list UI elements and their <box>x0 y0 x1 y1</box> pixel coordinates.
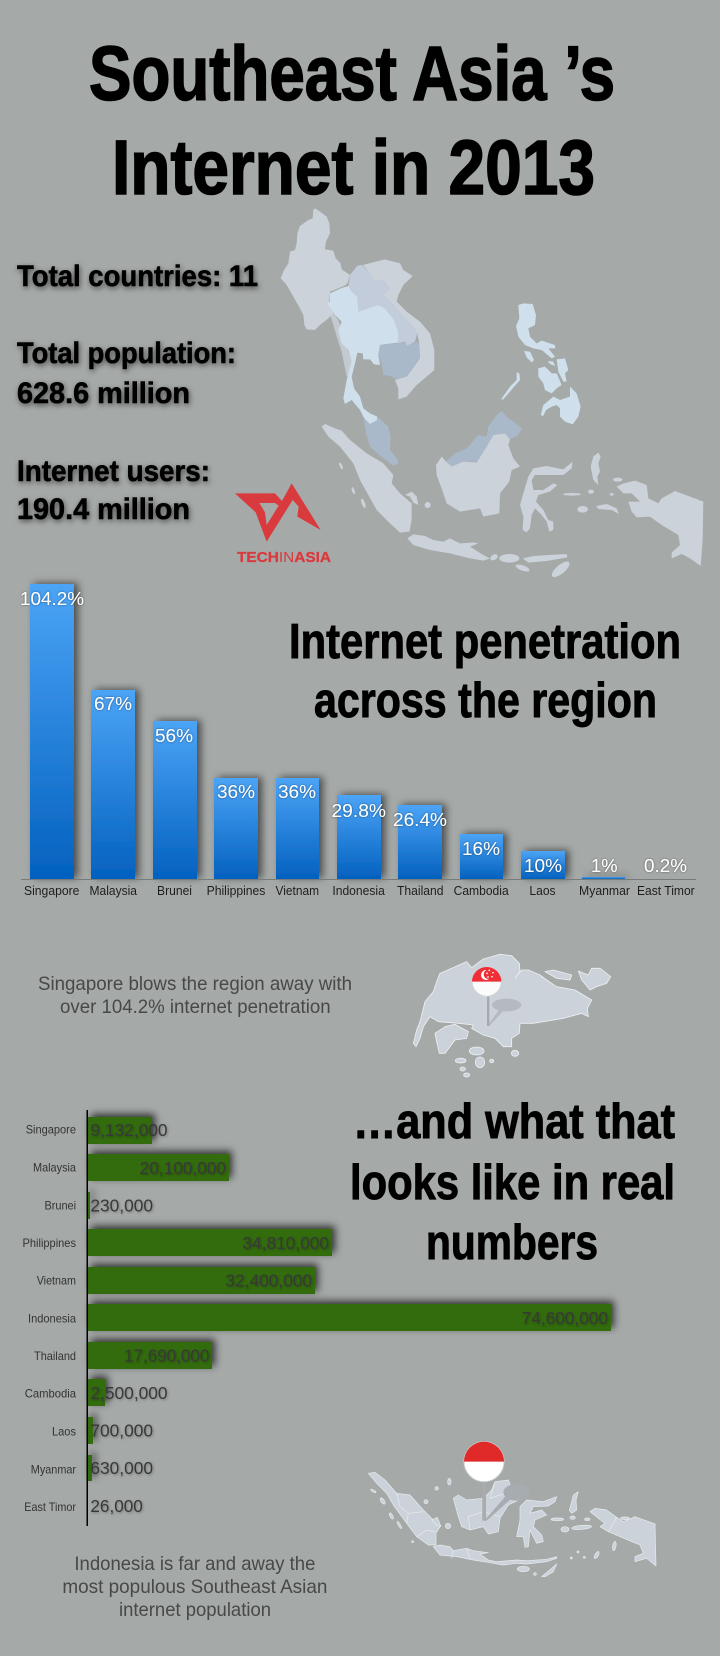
province lines <box>397 1482 617 1558</box>
percentage labels: 104.2% <box>20 588 84 609</box>
value labels: 34,810,000 <box>242 1233 329 1253</box>
caption: Indonesia: internet population <box>119 1599 271 1621</box>
value labels: 74,600,000 <box>522 1308 608 1328</box>
value labels: 20,100,000 <box>140 1158 226 1178</box>
value labels: 230,000 <box>90 1196 153 1216</box>
percentage labels <box>20 588 687 876</box>
bars <box>30 584 625 879</box>
percentage labels: 26.4% <box>393 809 447 830</box>
heading: real numbers: numbers <box>426 1216 598 1270</box>
caption: Singapore <box>38 973 352 1018</box>
logo: Tech in Asia: TECHINASIA <box>237 549 331 566</box>
country labels: Malaysia <box>90 884 137 898</box>
bar chart: internet users <box>22 1110 611 1526</box>
caption: Indonesia: most populous Southeast Asian <box>62 1576 327 1598</box>
caption: Singapore: Singapore blows the region away with <box>38 973 352 995</box>
country labels: Singapore <box>26 1122 76 1136</box>
caption: Singapore: over 104.2% internet penetration <box>60 996 331 1018</box>
country labels: Myanmar <box>579 884 630 898</box>
country labels <box>24 884 695 898</box>
caption: Indonesia <box>62 1553 327 1621</box>
country labels: Thailand <box>34 1349 76 1363</box>
country labels: Vietnam <box>276 884 319 898</box>
logo: Tech in Asia <box>235 483 331 566</box>
value labels: 26,000 <box>90 1496 143 1516</box>
green bars <box>88 1117 611 1481</box>
percentage labels: 36% <box>278 781 316 802</box>
country labels: Philippines <box>207 884 265 898</box>
country labels: Thailand <box>397 884 444 898</box>
country labels: Laos <box>529 884 556 898</box>
country labels: Laos <box>52 1424 76 1438</box>
country labels: Brunei <box>157 884 192 898</box>
percentage labels: 36% <box>217 781 255 802</box>
title: Internet in 2013 <box>112 125 595 211</box>
value labels <box>90 1120 608 1516</box>
country labels: Cambodia <box>25 1386 76 1400</box>
value labels: 9,132,000 <box>90 1120 168 1140</box>
value labels: 700,000 <box>90 1421 153 1441</box>
value labels: 2,500,000 <box>90 1383 168 1403</box>
percentage labels: 16% <box>462 838 500 859</box>
title <box>89 31 615 211</box>
heading: internet penetration <box>289 615 681 728</box>
country labels <box>22 1122 76 1514</box>
percentage labels: 56% <box>155 725 193 746</box>
country labels: East Timor <box>637 884 695 898</box>
country labels: East Timor <box>24 1500 76 1514</box>
pin: Singapore flag <box>472 967 501 1026</box>
key statistics: Total countries: 11 <box>17 260 258 293</box>
bar chart: internet penetration <box>20 584 696 898</box>
value labels: 32,400,000 <box>225 1271 312 1291</box>
country labels: Vietnam <box>37 1274 76 1288</box>
country labels: Indonesia <box>332 884 385 898</box>
pin shadow <box>484 1484 530 1521</box>
percentage labels: 1% <box>591 855 618 876</box>
country labels: Malaysia <box>33 1160 76 1174</box>
heading: real numbers <box>350 1095 675 1270</box>
value labels: 17,690,000 <box>124 1346 210 1366</box>
country labels: Philippines <box>22 1236 76 1250</box>
map: Indonesia with pin <box>368 1442 656 1577</box>
heading: internet penetration: across the region <box>314 674 657 728</box>
key statistics: 628.6 million <box>17 377 190 410</box>
country labels: Myanmar <box>31 1462 76 1476</box>
heading: real numbers: looks like in real <box>350 1156 675 1210</box>
country labels: Cambodia <box>454 884 509 898</box>
country labels: Singapore <box>24 884 79 898</box>
percentage labels: 0.2% <box>644 855 687 876</box>
pin: Indonesia flag <box>464 1442 504 1521</box>
title: Southeast Asia ’s <box>89 31 615 117</box>
map: Singapore with pin <box>413 954 611 1077</box>
key statistics: Internet users: <box>17 455 210 488</box>
percentage labels: 29.8% <box>332 800 386 821</box>
caption: Indonesia: Indonesia is far and away the <box>74 1553 315 1575</box>
heading: real numbers: …and what that <box>353 1095 675 1149</box>
value labels: 630,000 <box>90 1458 153 1478</box>
key statistics <box>17 260 258 526</box>
percentage labels: 10% <box>524 855 562 876</box>
map: Southeast Asia <box>281 208 703 580</box>
percentage labels: 67% <box>94 693 132 714</box>
country labels: Indonesia <box>28 1312 76 1326</box>
pin shadow <box>487 999 521 1026</box>
key statistics: 190.4 million <box>17 493 190 526</box>
country labels: Brunei <box>44 1198 76 1212</box>
key statistics: Total population: <box>17 337 236 370</box>
